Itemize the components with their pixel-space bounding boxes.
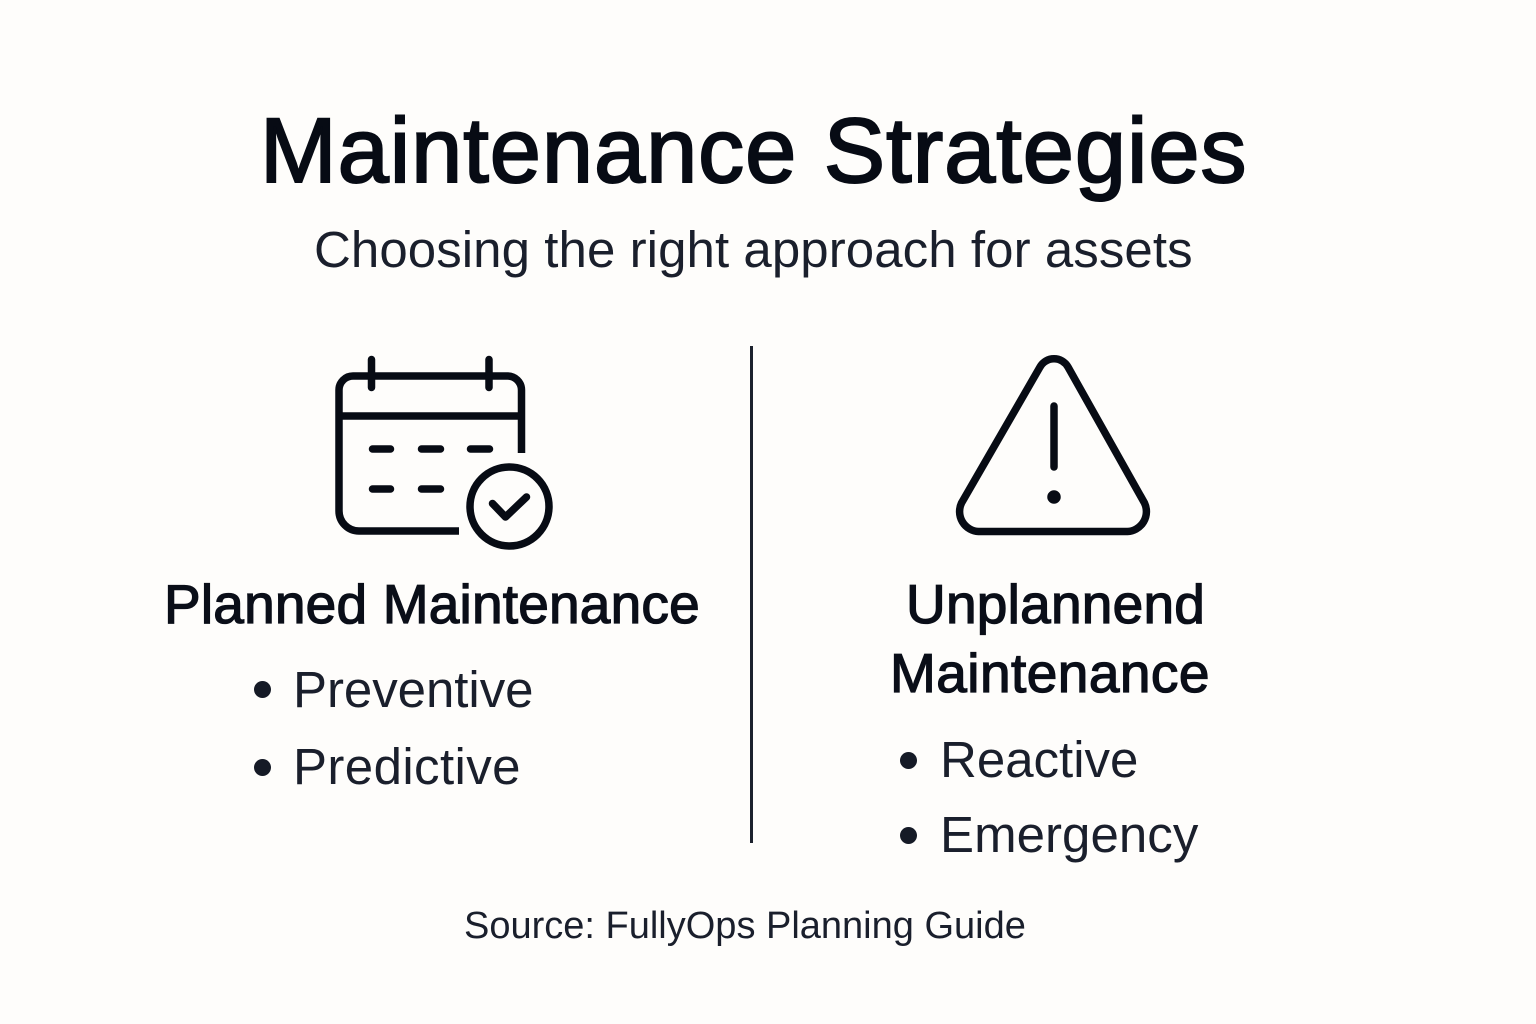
icon: calendar with check xyxy=(335,356,553,550)
list item: preventive: Preventive xyxy=(293,661,533,718)
divider xyxy=(750,346,753,843)
title: Maintenance Strategies xyxy=(260,100,1247,202)
heading: unplannend maintenance: Maintenance xyxy=(890,642,1210,704)
list item: emergency: Emergency xyxy=(940,806,1198,863)
heading: unplannend maintenance: Unplannend xyxy=(906,573,1205,635)
source note: Source: FullyOps Planning Guide xyxy=(464,905,1026,947)
panel: planned maintenance xyxy=(164,573,700,795)
icon: warning triangle xyxy=(956,355,1150,536)
heading: planned maintenance: Planned Maintenance xyxy=(164,573,700,635)
list item: reactive: Reactive xyxy=(940,731,1138,788)
list item: predictive: Predictive xyxy=(293,738,521,795)
subtitle: Choosing the right approach for assets xyxy=(314,221,1193,278)
panel: unplanned maintenance xyxy=(890,573,1210,863)
heading: unplannend maintenance xyxy=(890,573,1210,704)
